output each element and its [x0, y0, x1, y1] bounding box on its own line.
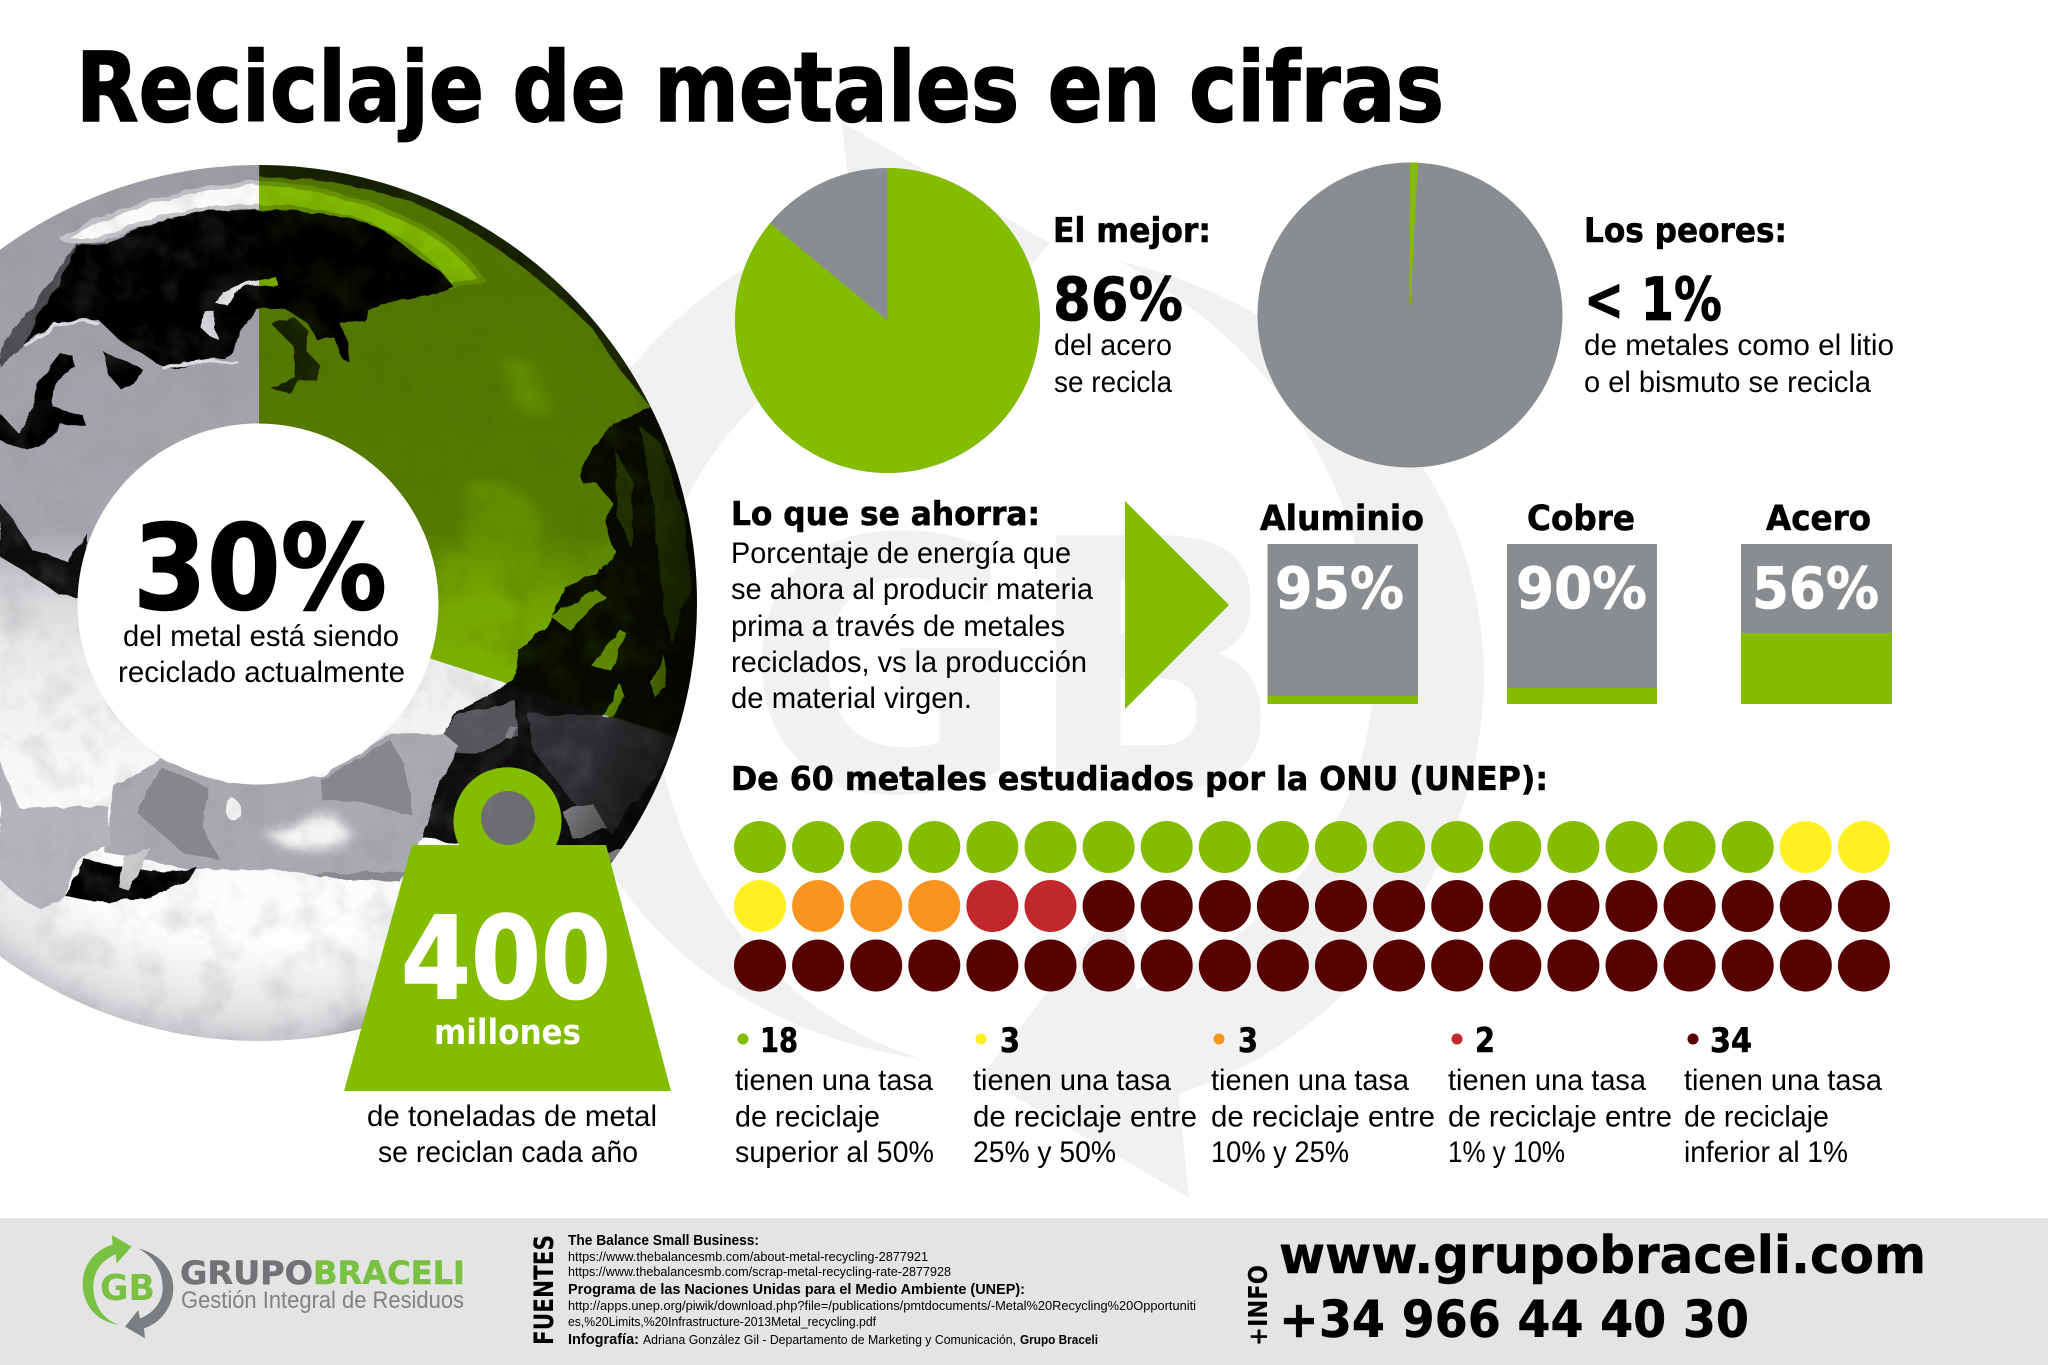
- sources text: Infografía:: [568, 1331, 639, 1348]
- logo icon: GB: [100, 1268, 155, 1309]
- bar: Acero 56%: 56%: [1752, 556, 1879, 622]
- legend: 34 under 1%: de reciclaje: [1684, 1100, 1829, 1134]
- text: Lo que se ahorra: se ahora al producir materia: [731, 573, 1093, 606]
- heading: De 60 metales: De 60 metales estudiados por la ONU (UNEP):: [731, 759, 1548, 798]
- sources text: [568, 1232, 1196, 1348]
- text: Los peores: [1584, 211, 1894, 399]
- text: Los peores: Los peores:: [1584, 211, 1787, 251]
- text: Lo que se ahorra: de material virgen.: [731, 682, 972, 715]
- legend: 2 between 1 and 10%: de reciclaje entre: [1448, 1100, 1672, 1134]
- legend: 3 between 25 and 50%: [973, 1021, 1197, 1169]
- globe: black northern land: [23, 210, 454, 368]
- legend: 2 between 1 and 10%: 1% y 10%: [1448, 1136, 1565, 1169]
- bar: Aluminio 95%: [1260, 499, 1424, 704]
- dots: row 3: [734, 940, 1890, 992]
- watermark: GB logo: GB: [745, 465, 1285, 873]
- globe with 30% sector: [0, 165, 697, 1041]
- text: Lo que se ahorra: prima a través de metales: [731, 610, 1065, 643]
- globe: south shadow: [312, 872, 404, 882]
- text: Los peores: o el bismuto se recicla: [1584, 366, 1871, 399]
- text: Lo que se ahorra: Lo que se ahorra:: [731, 494, 1040, 533]
- legend: 3 between 25 and 50%: tienen una tasa: [973, 1064, 1171, 1097]
- text: El mejor: El mejor:: [1053, 211, 1211, 251]
- globe: light patches in green: [442, 358, 551, 602]
- legend: 34 under 1%: inferior al 1%: [1684, 1136, 1848, 1169]
- weight caption: se reciclan cada año: [378, 1136, 638, 1169]
- weight icon: 400 millones: [344, 767, 671, 1091]
- weight caption: de toneladas de metal: [367, 1100, 657, 1133]
- bar: Acero 56%: Acero: [1766, 499, 1871, 539]
- legend: 34 under 1%: [1684, 1021, 1882, 1169]
- legend: 18 over 50%: de reciclaje: [735, 1100, 880, 1134]
- legend: 3 between 25 and 50%: 3: [1000, 1021, 1020, 1061]
- bar: Aluminio 95%: 95%: [1275, 556, 1404, 622]
- sources text: The Balance Small Business:: [568, 1232, 759, 1249]
- legend: 3 between 25 and 50%: 25% y 50%: [973, 1136, 1116, 1169]
- legend: 34 under 1%: 34: [1710, 1021, 1752, 1061]
- globe: mottled texture: [0, 150, 710, 770]
- white circle: 30%: del metal está siendo: [123, 620, 399, 653]
- globe: east gray rim: [528, 713, 679, 833]
- legend: 18 over 50%: 18: [760, 1021, 798, 1061]
- globe: top bright band: [64, 183, 482, 287]
- dots: row 1: [734, 821, 1890, 873]
- title: Reciclaje de metales en cifras: [76, 32, 1444, 144]
- globe: olive streaks in east land: [615, 427, 691, 643]
- globe: black land west 3: [0, 503, 87, 598]
- label: FUENTES: FUENTES: [529, 1235, 560, 1345]
- white circle: 30%: 30%: [133, 499, 387, 637]
- text: Los peores: < 1%: [1584, 265, 1722, 335]
- bar: Cobre 90%: [1507, 499, 1657, 704]
- arrow: green triangle: [1125, 501, 1229, 709]
- dots: row 2: [734, 880, 1890, 932]
- footer logo: Grupo Braceli: Gestión Integral de Residuos: [181, 1287, 464, 1314]
- bar: Acero 56%: [1741, 499, 1892, 704]
- globe: green 30% overlay: [259, 165, 697, 738]
- sources text: https://www.thebalancesmb.com/about-metal-recycling-2877921: [568, 1250, 928, 1264]
- white circle: 30%: reciclado actualmente: [118, 656, 405, 689]
- globe: lake spike: [118, 847, 151, 892]
- text: El mejor: [1053, 211, 1211, 399]
- globe: dark strip west: [0, 243, 108, 367]
- footer band: [0, 1218, 2048, 1365]
- sources text: Adriana González Gil - Departamento de Marketing y Comunicación,: [643, 1333, 1016, 1347]
- weight icon: 400 millones: 400: [401, 892, 611, 1025]
- footer logo: Grupo Braceli: [83, 1235, 465, 1338]
- sources text: Grupo Braceli: [1020, 1333, 1098, 1347]
- phone: +34 966 44 40 30: [1279, 1291, 1749, 1350]
- globe: shaded east edge: [318, 400, 696, 1037]
- text: El mejor: 86%: [1053, 265, 1183, 335]
- sources text: https://www.thebalancesmb.com/scrap-metal-recycling-rate-2877928: [568, 1265, 951, 1279]
- legend: 18 over 50%: tienen una tasa: [735, 1064, 933, 1097]
- text: Lo que se ahorra: reciclados, vs la producción: [731, 646, 1087, 679]
- logo icon: [83, 1235, 173, 1338]
- legend: 18 over 50%: superior al 50%: [735, 1136, 934, 1169]
- text: Los peores: de metales como el litio: [1584, 329, 1894, 362]
- sources text: es,%20Limits,%20Infrastructure-2013Metal_recycling.pdf: [568, 1315, 876, 1329]
- globe: black land west 2: [103, 352, 143, 390]
- text: El mejor: se recicla: [1054, 366, 1172, 399]
- legend: 18 over 50%: [735, 1021, 934, 1169]
- legend: 3 between 25 and 50%: de reciclaje entre: [973, 1100, 1197, 1134]
- weight caption: [367, 1100, 657, 1169]
- globe: east land highlight below weight: [507, 727, 606, 840]
- legend: 3 between 10 and 25%: [1211, 1021, 1435, 1169]
- footer logo: Grupo Braceli: BRACELI: [313, 1254, 465, 1292]
- legend: 2 between 1 and 10%: [1448, 1021, 1672, 1169]
- legend: 3 between 10 and 25%: 3: [1238, 1021, 1258, 1061]
- globe: central highlight: [266, 813, 354, 850]
- globe: inland dark green patch: [271, 317, 321, 393]
- globe: central gray land: [106, 733, 459, 877]
- globe: east coast gray: [443, 700, 519, 753]
- globe: east black land: [422, 407, 697, 853]
- globe: coast highlights: [25, 320, 239, 367]
- globe: pale island: [200, 313, 219, 340]
- label: +INFO: +INFO: [1244, 1265, 1274, 1346]
- globe: bright spot: [226, 799, 241, 821]
- weight icon: 400 millones: millones: [434, 1013, 581, 1053]
- bar: Cobre 90%: Cobre: [1527, 499, 1635, 539]
- sources text: Programa de las Naciones Unidas para el Medio Ambiente (UNEP):: [568, 1281, 1025, 1298]
- dot chart: 60 metals: [734, 821, 1890, 992]
- pie chart: best 86%: [735, 168, 1040, 473]
- website: www.grupobraceli.com: [1279, 1226, 1926, 1286]
- pie chart: worst under 1%: [1258, 162, 1562, 468]
- legend: 2 between 1 and 10%: tienen una tasa: [1448, 1064, 1646, 1097]
- globe: dark rim north east: [258, 165, 651, 407]
- logo wordmark: GRUPO: [180, 1254, 313, 1292]
- text: Lo que se ahorra: Porcentaje de energía que: [731, 537, 1071, 570]
- legend: 34 under 1%: tienen una tasa: [1684, 1064, 1882, 1097]
- globe: darker patches in central land: [138, 740, 413, 860]
- globe: gray patch seen through weight ring: [481, 791, 535, 845]
- globe: black land west 1: [0, 353, 87, 450]
- watermark: GB logo: [540, 122, 1484, 1198]
- legend: 3 between 10 and 25%: tienen una tasa: [1211, 1064, 1409, 1097]
- globe: black lake: [64, 860, 198, 902]
- globe: left gray land: [0, 760, 110, 910]
- text: Lo que se ahorra: [731, 494, 1093, 715]
- legend: 3 between 10 and 25%: de reciclaje entre: [1211, 1100, 1435, 1134]
- globe: east highlights: [551, 543, 666, 720]
- bar: Aluminio 95%: Aluminio: [1260, 499, 1424, 539]
- legend: 3 between 10 and 25%: 10% y 25%: [1211, 1136, 1349, 1169]
- text: El mejor: del acero: [1054, 329, 1172, 362]
- white circle: 30%: [78, 424, 438, 784]
- globe: pale inlet in black land: [216, 277, 277, 305]
- legend: 2 between 1 and 10%: 2: [1475, 1021, 1495, 1061]
- sources text: http://apps.unep.org/piwik/download.php?file=/publications/pmtdocuments/-Metal%20Recycling%20Opportuniti: [568, 1299, 1196, 1313]
- bar: Cobre 90%: 90%: [1516, 556, 1647, 622]
